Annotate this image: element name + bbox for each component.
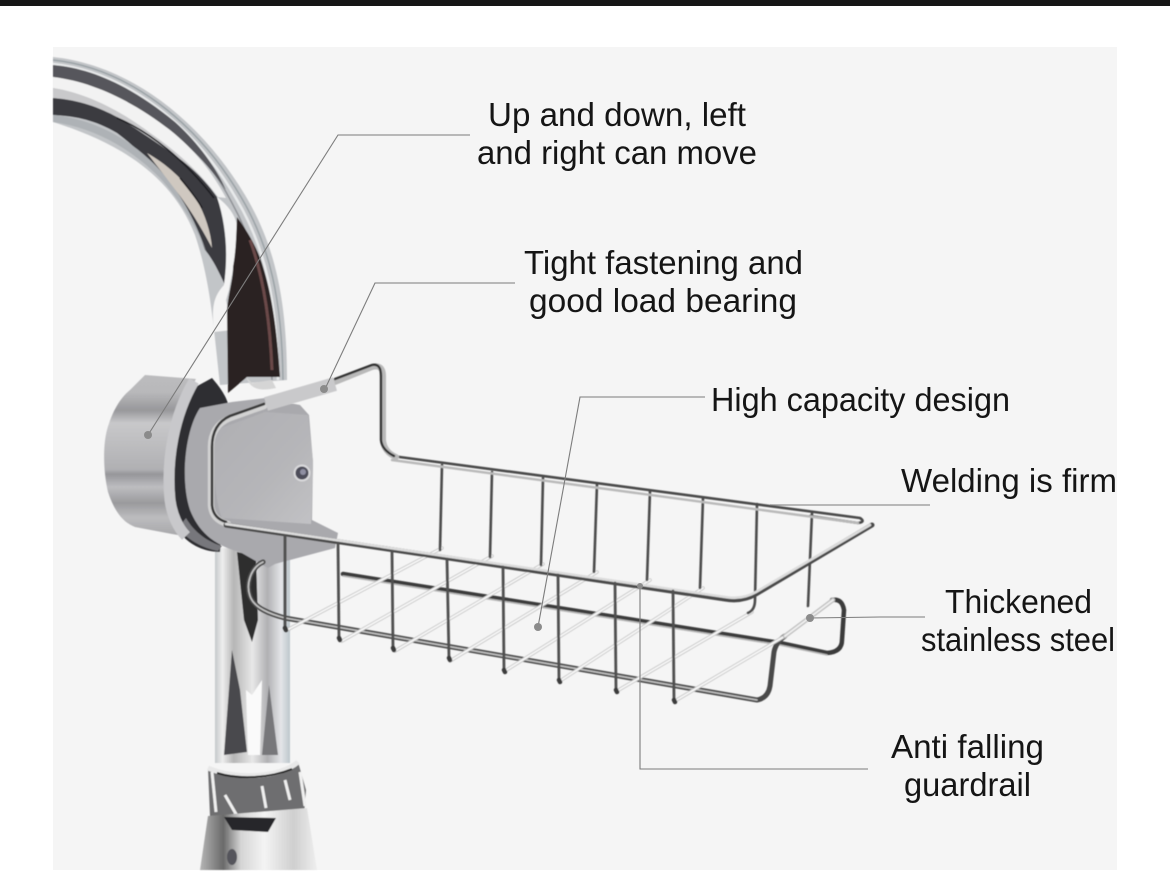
guardrail slope highlight (785, 600, 833, 636)
knob cap (104, 375, 196, 536)
pipe reflection: dark blob (237, 552, 258, 642)
rear vertical bars (440, 465, 812, 613)
guardrail slope (785, 600, 833, 636)
text: tight fastening: Tight fastening and (524, 244, 803, 281)
text: tight fastening: good load bearing (529, 282, 797, 319)
arch white band (53, 77, 226, 198)
callout: leader lines (148, 135, 930, 769)
arch thin dark streaks (117, 118, 214, 208)
pipe reflection: lower dark streak (224, 650, 247, 755)
pipe reflection: highlight (246, 680, 262, 755)
front lower runner shine (249, 562, 757, 700)
arch upper dark band (53, 65, 226, 190)
top dark bar (0, 0, 1170, 6)
front rail highlight (226, 524, 870, 598)
knob cap rim (169, 381, 194, 536)
arch light band (53, 88, 217, 197)
base cross wires (287, 548, 785, 701)
top hook wire (335, 366, 396, 457)
faucet flare (200, 808, 317, 870)
faucet arch (53, 57, 287, 385)
pipe reflection: second dark streak (262, 685, 278, 755)
text: anti falling: guardrail (904, 766, 1031, 803)
front lower runner (249, 562, 785, 700)
text: tight fastening (524, 244, 803, 319)
rear lower runner shine (343, 576, 827, 655)
wire feet (285, 628, 675, 702)
text: anti falling (891, 728, 1044, 803)
text: high capacity: High capacity design (711, 381, 1010, 418)
collar rim (208, 762, 298, 776)
leader: stainless (810, 617, 925, 618)
leader: guardrail (640, 586, 868, 769)
leader: capacity (538, 397, 705, 627)
bracket plate inner (214, 412, 313, 524)
knob lower ring (178, 518, 222, 551)
arch outer stripes (53, 60, 283, 380)
bracket bolt shine (300, 469, 306, 475)
callout dots (144, 385, 814, 631)
text: welding: Welding is firm (901, 462, 1117, 499)
leader: welding (770, 504, 930, 506)
top hook wire dark core (335, 365, 394, 456)
text: up and down (477, 96, 757, 171)
text: up and down: Up and down, left (488, 96, 746, 133)
sleeve on wire (266, 384, 335, 404)
bracket bolt ring (294, 464, 310, 482)
arch white edge (213, 197, 238, 332)
text: up and down: and right can move (477, 134, 757, 171)
flare dark band (224, 817, 276, 832)
text: thickened: Thickened (945, 583, 1092, 620)
bracket bolt (296, 466, 308, 480)
base cross wire highlights (287, 548, 785, 701)
arch inner pale edge (53, 115, 210, 262)
text: thickened: stainless steel (921, 621, 1115, 658)
collar groove (217, 769, 292, 777)
faucet reflection: dark stem (227, 217, 280, 393)
rear lower runner (343, 574, 844, 653)
flare bolt (227, 849, 237, 865)
arch lower dark wedge (53, 98, 226, 285)
faucet reflection: clip shine (246, 377, 276, 390)
faucet illustration (53, 57, 338, 870)
wire rack (211, 365, 872, 702)
leader: fastening (325, 283, 515, 389)
faucet lower pipe (215, 548, 290, 763)
knob dark ring (173, 378, 230, 552)
bracket plate (185, 398, 338, 568)
left wire dark core (212, 404, 264, 522)
collar glints (212, 772, 305, 822)
faucet collar (208, 762, 306, 816)
front vertical bars (285, 536, 674, 700)
leader: move (148, 135, 470, 435)
arch cream reflection (147, 153, 212, 248)
text: anti falling: Anti falling (891, 728, 1044, 765)
left wire (211, 406, 264, 524)
faucet reflection: reddish streak (250, 240, 272, 370)
back rail highlight (392, 460, 858, 523)
back rail (392, 456, 863, 523)
text: thickened (921, 583, 1115, 658)
front rail (226, 525, 872, 600)
